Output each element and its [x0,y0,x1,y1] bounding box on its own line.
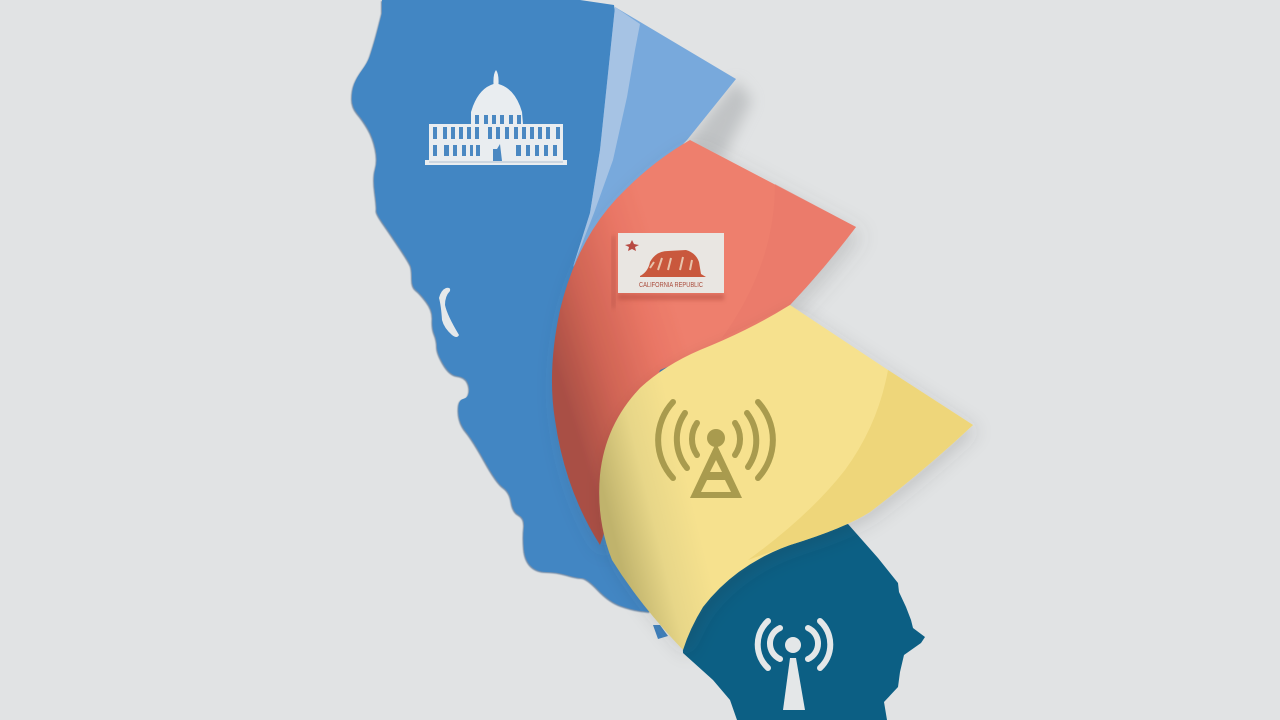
icon: white radio antenna [758,621,830,710]
flag star [625,240,639,251]
fold shade on yellow flap [748,370,973,560]
panel: blue northern California layer [352,0,700,639]
fold shade on red flap [722,184,856,338]
small blue coastline fragment [653,625,668,639]
icon: California flag [618,233,724,293]
panel: yellow layer [599,305,973,650]
icon: gold radio tower [658,402,773,498]
lake cutout [439,288,459,337]
flag bear [640,250,706,277]
fold highlight stripe [573,7,640,267]
flag caption: CALIFORNIA REPUBLIC [639,282,703,289]
panel: light blue folded flap [573,7,736,267]
panel: teal southern California layer [680,524,925,720]
flag shadow [612,236,615,308]
shadow under blue flap [680,80,752,160]
panel: red flag layer [552,140,856,545]
icon: capitol building [425,70,567,165]
